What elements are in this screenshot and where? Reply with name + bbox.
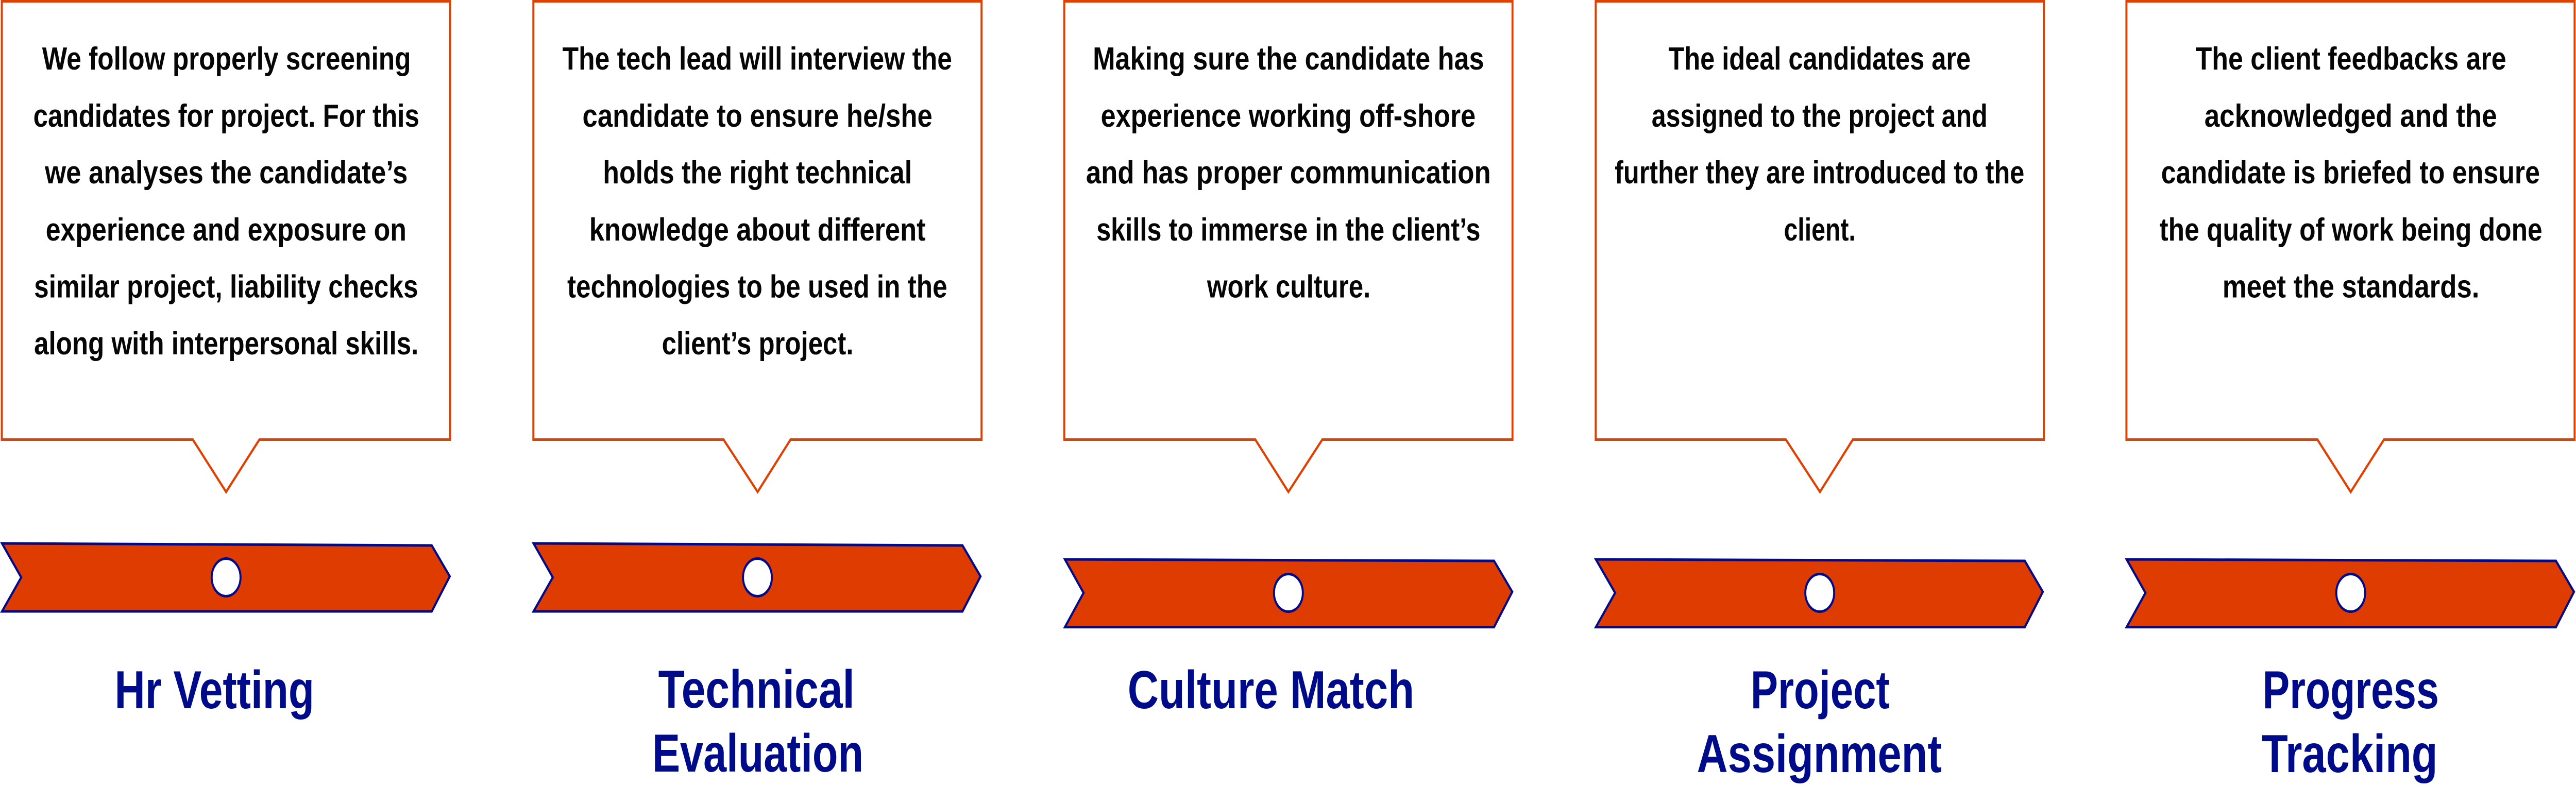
callout text: experience working off-shore	[1101, 98, 1476, 133]
step heading: Culture Match	[1128, 660, 1414, 720]
panel: Technical Evaluation	[533, 1, 981, 783]
arrow banner	[2, 543, 450, 611]
callout box	[1064, 1, 1513, 492]
callout text: we analyses the candidate’s	[44, 155, 408, 190]
panel: Project Assignment	[1596, 1, 2044, 783]
circle marker	[743, 558, 772, 596]
circle marker	[1805, 574, 1834, 612]
step heading: Tracking	[2262, 724, 2438, 783]
arrow banner	[1065, 559, 1512, 627]
callout text: the quality of work being done	[2160, 212, 2543, 247]
callout text: candidates for project. For this	[33, 98, 419, 133]
step heading: Technical	[658, 659, 855, 719]
callout text: and has proper communication	[1086, 155, 1491, 190]
callout text: work culture.	[1207, 269, 1370, 304]
arrow banner	[2127, 559, 2574, 627]
step heading: Evaluation	[652, 723, 863, 783]
panel: Culture Match	[1064, 1, 1513, 720]
callout text: technologies to be used in the	[567, 269, 947, 304]
panel: Hr Vetting	[2, 1, 450, 720]
callout text: meet the standards.	[2223, 269, 2479, 304]
circle marker	[2336, 574, 2365, 612]
circle marker	[212, 558, 241, 596]
callout text: experience and exposure on	[46, 212, 406, 247]
callout text	[33, 41, 419, 361]
callout text: Making sure the candidate has	[1093, 41, 1484, 76]
callout text: The client feedbacks are	[2196, 41, 2506, 76]
callout text: client.	[1784, 212, 1856, 247]
panel: Progress Tracking	[2126, 1, 2574, 783]
step heading	[1697, 660, 1942, 783]
callout text: along with interpersonal skills.	[34, 326, 418, 361]
callout text: candidate to ensure he/she	[583, 98, 933, 133]
callout text	[1086, 41, 1491, 304]
arrow banner	[1596, 559, 2043, 627]
callout text: skills to immerse in the client’s	[1096, 212, 1480, 247]
step heading: Assignment	[1697, 724, 1942, 783]
callout text: client’s project.	[662, 326, 854, 361]
callout text	[563, 41, 952, 361]
callout text: further they are introduced to the	[1615, 155, 2024, 190]
step heading	[2262, 660, 2439, 783]
callout box	[2, 1, 450, 492]
callout text	[2160, 41, 2543, 304]
arrow banner	[534, 543, 980, 611]
callout text	[1615, 41, 2024, 247]
callout text: holds the right technical	[603, 155, 912, 190]
callout box	[1596, 1, 2044, 492]
callout text: acknowledged and the	[2205, 98, 2497, 133]
callout text: The tech lead will interview the	[563, 41, 952, 76]
callout text: candidate is briefed to ensure	[2161, 155, 2540, 190]
callout text: similar project, liability checks	[34, 269, 418, 304]
callout text: We follow properly screening	[42, 41, 411, 76]
callout text: knowledge about different	[589, 212, 926, 247]
callout text: The ideal candidates are	[1668, 41, 1971, 76]
callout text: assigned to the project and	[1652, 98, 1988, 133]
step heading: Hr Vetting	[115, 660, 314, 720]
step heading	[652, 659, 863, 783]
step heading: Progress	[2263, 660, 2439, 720]
callout box	[533, 1, 981, 492]
callout box	[2126, 1, 2574, 492]
step heading: Project	[1751, 660, 1890, 720]
circle marker	[1274, 574, 1303, 612]
